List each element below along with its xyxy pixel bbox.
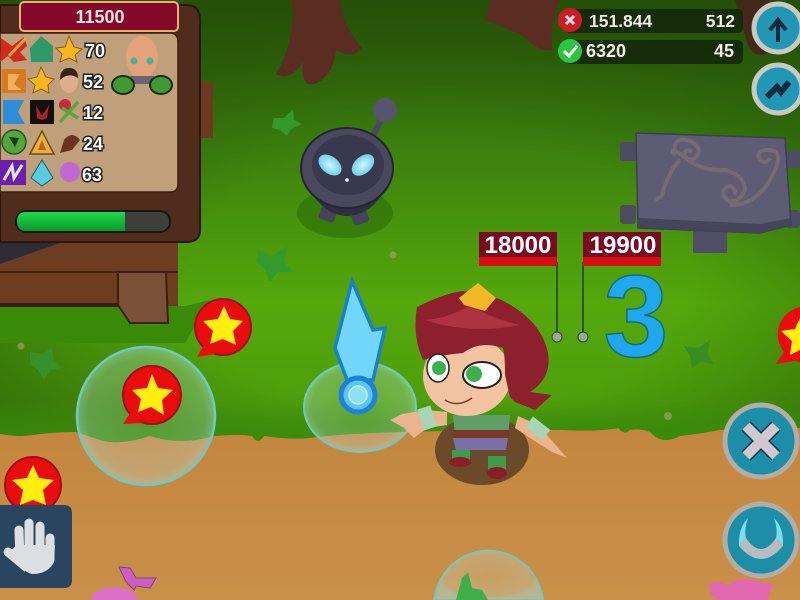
icon row 5: 63 [82, 165, 102, 185]
icon row 1 [0, 36, 105, 62]
icon row 4 [2, 130, 103, 154]
panel header score: 11500 [75, 7, 125, 27]
icon row 2: 52 [83, 72, 103, 92]
bubble: blue pointer [304, 281, 416, 452]
marker: star red top [195, 299, 251, 357]
tree trunks [276, 0, 770, 85]
dark wedge under board [0, 243, 60, 264]
progress bar [16, 211, 170, 232]
button: turn arrow [754, 65, 800, 113]
marker: star red right edge [776, 307, 800, 364]
small flowers [18, 252, 672, 420]
background: dirt path [0, 428, 800, 600]
parchment [0, 33, 178, 192]
hero character [390, 283, 567, 485]
stat row green: 6320 [586, 41, 626, 61]
marker: star red bottom-left [5, 457, 61, 513]
button: shield [725, 504, 797, 576]
button: hand [0, 505, 72, 588]
button: close [725, 405, 797, 477]
stat row red: 512 [706, 11, 735, 31]
button: up arrow [754, 4, 800, 52]
flag: 18000 [479, 232, 562, 342]
stat row red [558, 8, 743, 33]
flag: 18000: 18000 [485, 232, 551, 259]
wooden deck [0, 82, 213, 343]
stat row green [558, 39, 743, 64]
stat row red: 151.844 [589, 11, 653, 31]
stone tablet with spiral [620, 133, 800, 253]
icon row 5 [0, 160, 102, 186]
robot enemy [297, 98, 397, 238]
panel: top stats [558, 8, 743, 64]
background: grass field [0, 0, 800, 445]
stat row green: 45 [714, 41, 734, 61]
bubble: star marker left [77, 347, 215, 485]
flag: 19900: 19900 [590, 232, 656, 259]
icon row 1: 70 [85, 41, 105, 61]
leaf sprites [30, 109, 714, 380]
panel: stats board [0, 2, 200, 242]
big number 3: 3 [604, 251, 668, 381]
character portrait [112, 36, 172, 94]
bubble: bottom green arrow [434, 551, 543, 600]
icon row 3 [3, 99, 103, 124]
flag: 19900 [578, 232, 661, 342]
icon row 3: 12 [83, 103, 103, 123]
icon row 2 [2, 67, 103, 93]
creature: pink left [90, 567, 156, 600]
icon row 4: 24 [83, 134, 103, 154]
creature: pink right [708, 579, 773, 600]
panel header score [20, 2, 178, 31]
